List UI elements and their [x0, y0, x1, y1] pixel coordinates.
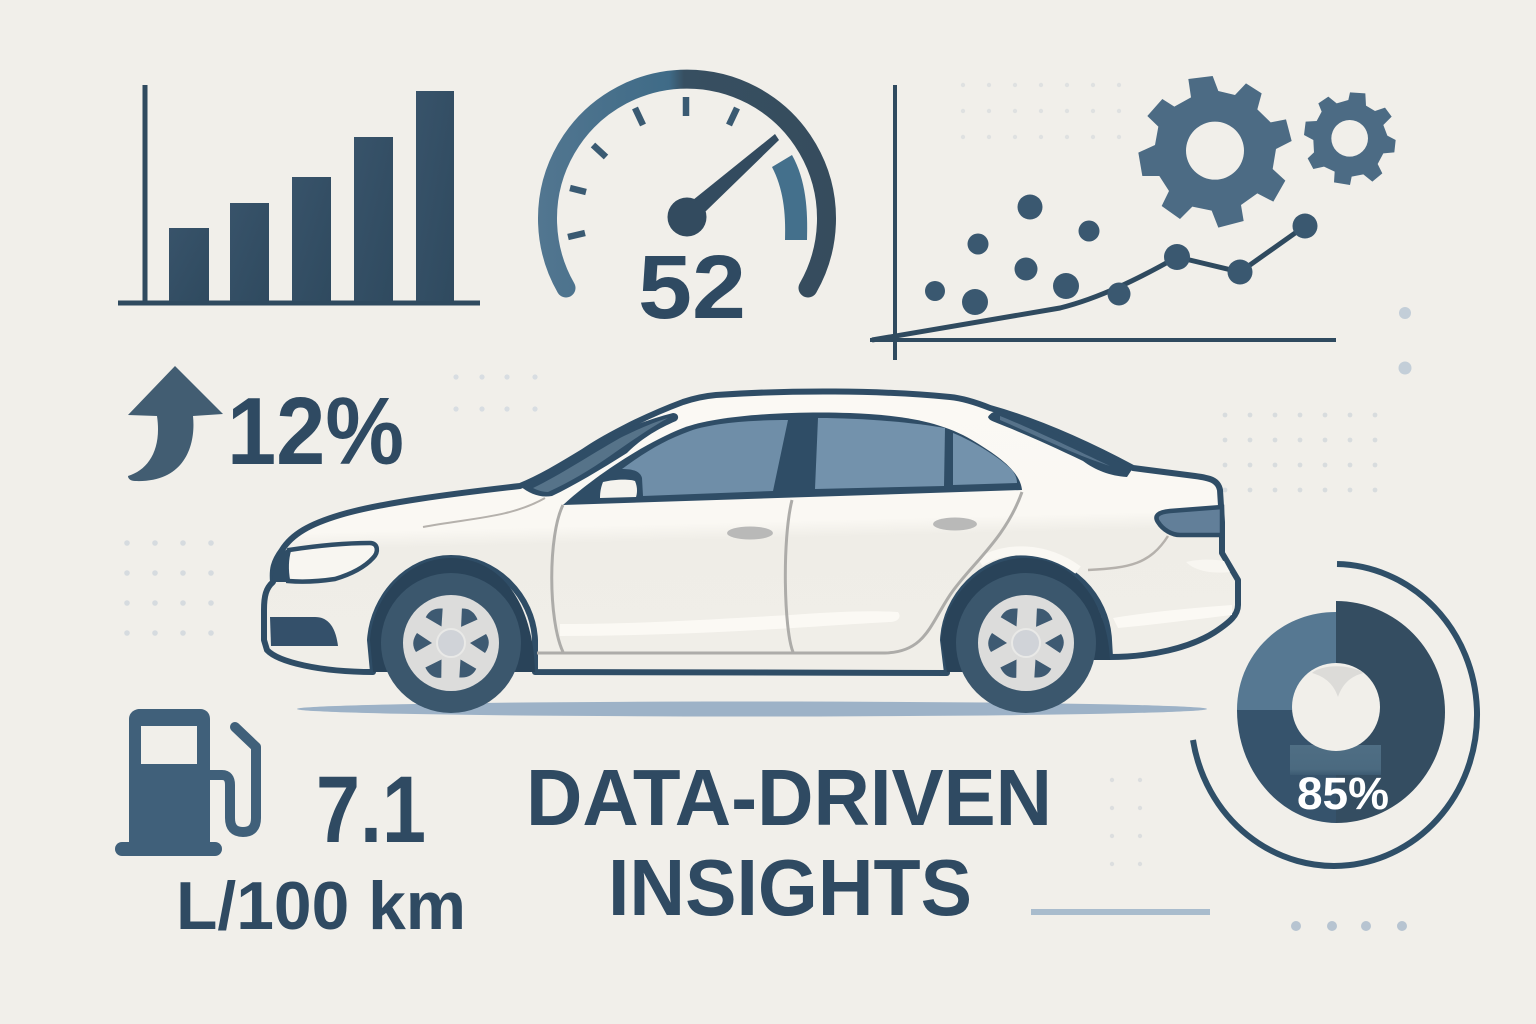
gauge high zone segment — [772, 155, 807, 240]
decorative dots: bottom row — [1291, 921, 1407, 931]
donut hole — [1292, 663, 1380, 751]
front sill highlight — [560, 611, 900, 636]
decorative dot grid: right of car — [1212, 403, 1387, 503]
windshield strip — [520, 413, 678, 497]
rear fender crease — [1088, 536, 1168, 570]
car body — [264, 391, 1238, 673]
front side window — [622, 420, 788, 496]
outer ring — [1193, 564, 1477, 866]
gauge arc — [548, 79, 826, 288]
lower air intake — [270, 617, 338, 646]
fuel stat — [115, 709, 466, 944]
fuel unit: L/100 km — [176, 868, 466, 944]
trend line — [872, 226, 1305, 340]
speedometer gauge — [548, 79, 826, 338]
title: DATA-DRIVEN — [526, 753, 1052, 842]
rear window strip — [988, 411, 1133, 477]
icon: fuel pump — [115, 709, 256, 856]
car illustration — [264, 391, 1238, 713]
rear door handle — [933, 518, 977, 530]
decorative dot grid: top right — [950, 72, 1132, 150]
growth stat — [128, 366, 404, 485]
scatter points — [925, 194, 1318, 315]
front door handle — [727, 526, 773, 540]
grille dark corner — [273, 548, 289, 582]
donut value: 85% — [1297, 768, 1389, 819]
scatter and trend chart — [870, 85, 1336, 360]
rear arch highlight — [980, 551, 1078, 570]
inner glow — [1290, 745, 1381, 775]
rear wheel arch — [941, 558, 1110, 672]
rear wheel — [956, 573, 1096, 713]
dark segment — [1336, 601, 1445, 823]
decorative dot grid: left of car — [113, 529, 225, 649]
headlight — [287, 543, 377, 582]
rear bumper highlight — [1113, 605, 1232, 628]
fuel value: 7.1 — [316, 757, 426, 863]
light segment — [1237, 612, 1336, 710]
mid segment — [1237, 710, 1336, 823]
title — [526, 753, 1052, 932]
icons: gears — [1138, 76, 1396, 228]
door seams — [537, 492, 1022, 653]
gauge needle — [693, 134, 779, 212]
decorative dot grid: centre left — [453, 374, 538, 412]
gauge hub — [668, 198, 706, 236]
title underline — [1031, 909, 1210, 915]
bar chart — [118, 85, 480, 303]
quarter window — [953, 433, 1017, 485]
rear side highlight — [1186, 560, 1230, 573]
front wheel — [381, 573, 521, 713]
donut chart — [1193, 564, 1477, 866]
gauge ticks — [568, 97, 737, 237]
decorative dots: right column — [1398, 307, 1412, 374]
gauge value: 52 — [638, 238, 746, 338]
growth value: 12% — [227, 378, 404, 485]
title: INSIGHTS — [608, 843, 972, 932]
door mirror — [600, 480, 637, 498]
window frame — [563, 412, 1022, 505]
icon: large gear — [1138, 76, 1292, 228]
front wheel arch — [370, 558, 535, 672]
front fender crease — [423, 498, 545, 527]
tail light — [1156, 507, 1222, 535]
ground shadow — [297, 702, 1207, 716]
rear side window — [815, 418, 945, 489]
hole highlight — [1312, 666, 1364, 697]
decorative dot grid: beside title — [1098, 766, 1154, 878]
icon: small gear — [1304, 92, 1396, 185]
icon: curved up arrow — [128, 366, 223, 481]
